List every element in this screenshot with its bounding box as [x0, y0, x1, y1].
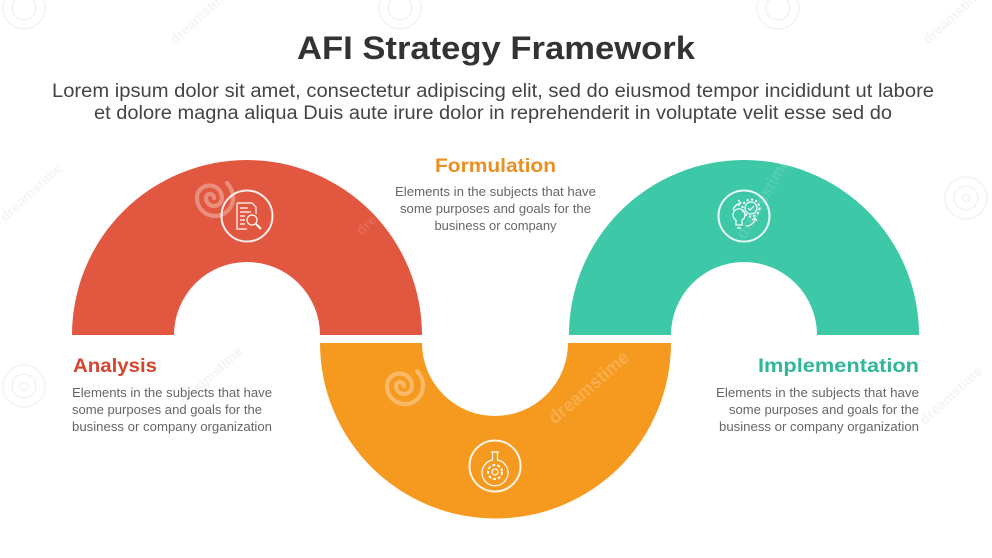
subtitle: et dolore magna aliqua Duis aute irure dolor in reprehenderit in voluptate velit esse sed do — [94, 103, 892, 124]
text: analysis: some purposes and goals for the — [72, 402, 262, 417]
watermark on arches — [197, 155, 793, 429]
icon: idea gear cycle — [718, 190, 770, 242]
text: implementation: Implementation — [758, 355, 919, 377]
faint page watermarks — [0, 0, 989, 427]
text: formulation: some purposes and goals for the — [400, 201, 591, 216]
text: implementation: Elements in the subjects that have — [716, 385, 919, 400]
title: AFI Strategy Framework — [297, 30, 695, 66]
text: formulation — [395, 155, 596, 233]
text: formulation: business or company — [434, 218, 557, 233]
text: formulation: Formulation — [435, 155, 556, 177]
panel: analysis arch — [72, 160, 422, 335]
faint page watermarks: dreamstime — [176, 343, 246, 407]
text: implementation: business or company organization — [719, 419, 919, 434]
subtitle — [52, 81, 934, 124]
watermark on arches: dre — [353, 211, 380, 238]
faint page watermarks: dreamstime — [916, 363, 986, 427]
panel: formulation lower arch — [320, 343, 671, 518]
text: analysis: Analysis — [73, 355, 157, 377]
text: implementation — [716, 355, 919, 434]
text: formulation: Elements in the subjects that have — [395, 184, 596, 199]
subtitle: Lorem ipsum dolor sit amet, consectetur adipiscing elit, sed do eiusmod tempor incididunt ut labore — [52, 81, 934, 102]
text: analysis: Elements in the subjects that have — [72, 385, 272, 400]
text: implementation: some purposes and goals for the — [729, 402, 919, 417]
icon: flask with flower — [470, 440, 520, 492]
panel: implementation arch — [569, 160, 919, 335]
watermark on arches: dreamstime — [545, 347, 634, 429]
icon: document with magnifier — [222, 190, 272, 242]
text: analysis — [72, 355, 272, 434]
watermark on arches: dreamstime — [732, 155, 793, 242]
text: analysis: business or company organization — [72, 419, 272, 434]
